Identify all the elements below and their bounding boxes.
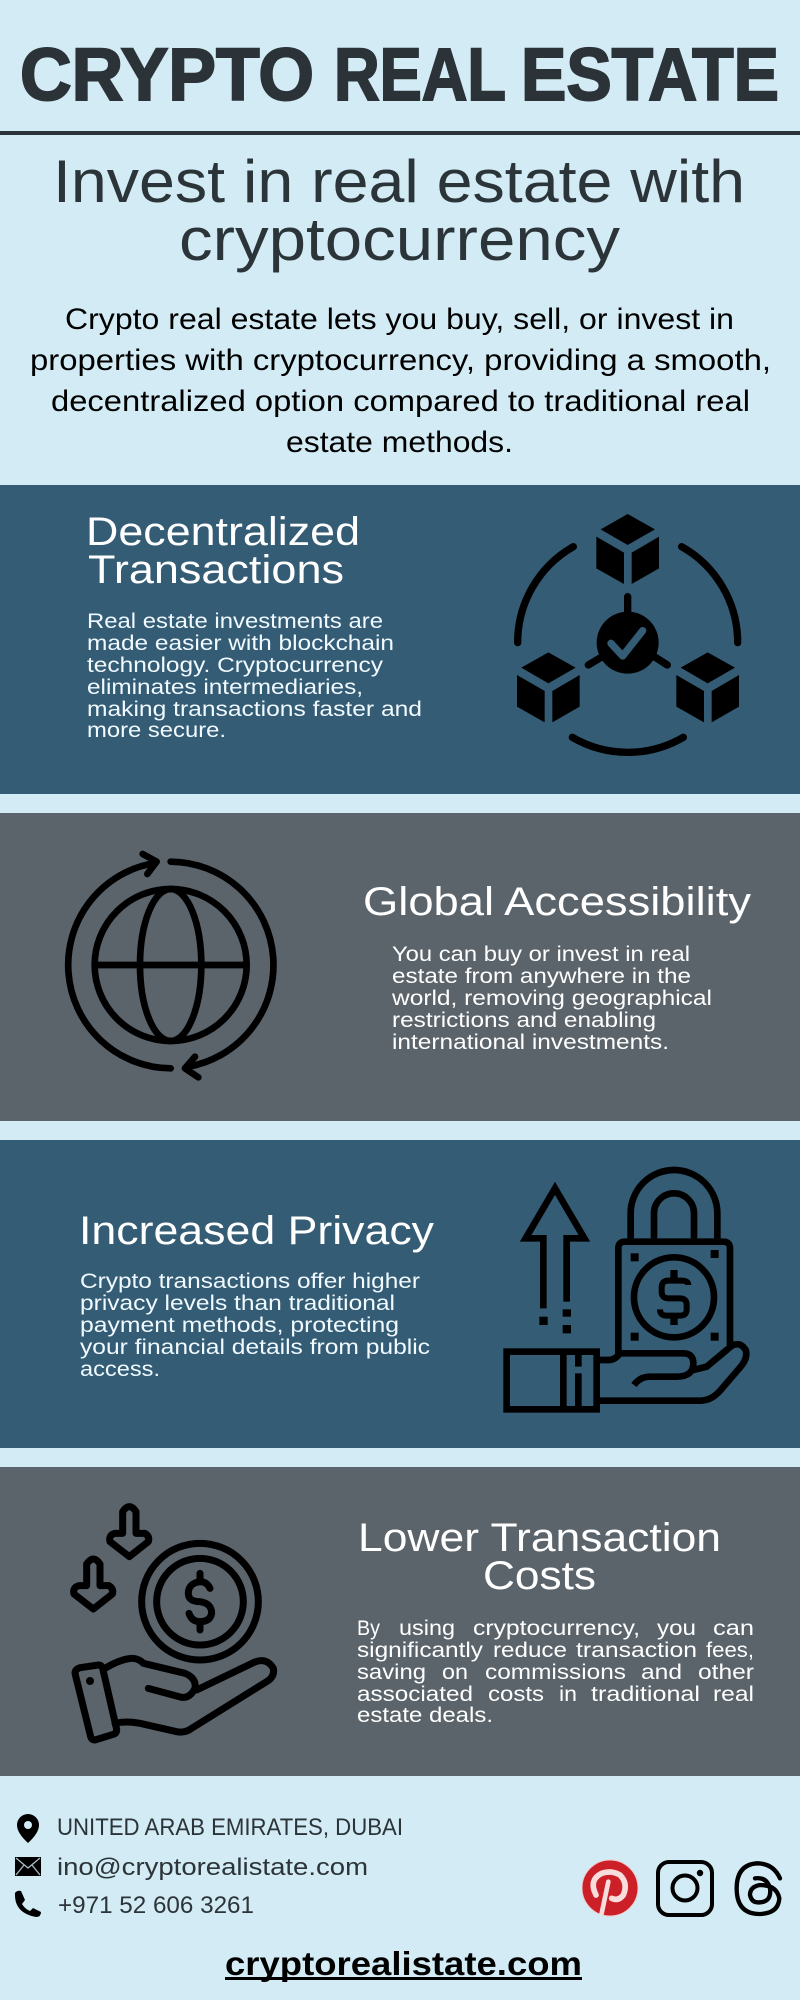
text: costs description: fees, [706,1638,754,1662]
icon: coin over hand with down arrows [74,1507,274,1740]
text: costs description: associated [357,1682,473,1706]
text: costs description [357,1616,754,1727]
text: decentralized description: eliminates intermediaries, [87,675,363,699]
text: decentralized description: made easier with blockchain [87,631,394,655]
title: REAL [334,33,506,116]
icon: envelope [15,1857,41,1876]
title [20,33,779,116]
text: costs description: saving [357,1660,426,1684]
heading: decentralized transactions [86,510,360,592]
text: costs description: costs [488,1682,544,1706]
text: costs description: you [657,1616,696,1640]
text: privacy description: access. [80,1357,160,1381]
text: global description [391,942,712,1054]
text: costs description: real [713,1682,754,1706]
text: costs description: in [559,1682,577,1706]
icon: blockchain network [517,514,739,752]
intro text: properties with cryptocurrency, providing a smooth, [30,344,771,377]
email: ino@cryptorealistate.com [57,1854,368,1881]
heading: decentralized transactions: Transactions [88,548,344,592]
text: privacy description [80,1269,430,1381]
text: privacy description: privacy levels than traditional [80,1291,395,1315]
text: costs description: other [698,1660,754,1684]
text: global description: estate from anywhere in the [392,964,691,988]
text: decentralized description: more secure. [87,718,226,742]
website link: cryptorealistate.com [225,1945,582,1982]
address: UNITED ARAB EMIRATES, DUBAI [57,1814,403,1841]
text: global description: world, removing geographical [391,986,712,1010]
text: costs description: using [399,1616,455,1640]
text: decentralized description: technology. Cryptocurrency [87,653,383,677]
divider [0,131,800,135]
text: costs description: traditional [591,1682,700,1706]
heading: lower transaction costs [358,1516,721,1598]
text: global description: You can buy or invest in real [392,942,690,966]
text: costs description: commissions [485,1660,626,1684]
title: ESTATE [521,33,779,116]
icon: instagram [658,1862,712,1915]
text: costs description: on [442,1660,468,1684]
footer: contact details [15,1814,403,1919]
text: decentralized description [87,609,422,742]
phone number: +971 52 606 3261 [58,1892,254,1919]
icon: phone [15,1891,41,1917]
text: costs description: By [357,1616,380,1640]
subtitle [53,148,745,273]
subtitle: Invest in real estate with [53,148,745,215]
heading: lower transaction costs: Lower Transaction [358,1516,721,1560]
icon: pinterest [582,1860,638,1916]
social icons [582,1860,780,1916]
panel: increased privacy [0,1140,800,1448]
text: costs description: estate deals. [357,1703,493,1727]
text: costs description: transaction [576,1638,697,1662]
text: costs description: cryptocurrency, [473,1616,640,1640]
title: CRYPTO [20,33,314,116]
heading: global accessibility: Global Accessibility [363,880,751,924]
text: decentralized description: making transactions faster and [87,697,422,721]
text: costs description: and [641,1660,682,1684]
text: costs description: can [713,1616,754,1640]
intro text: estate methods. [286,426,513,459]
heading: lower transaction costs: Costs [483,1554,596,1598]
icon: threads [737,1863,780,1914]
intro text: decentralized option compared to traditional real [51,385,750,418]
text: costs description: significantly [357,1638,483,1662]
icon: padlock on hand with up arrow [507,1170,746,1409]
text: privacy description: Crypto transactions offer higher [80,1269,420,1293]
subtitle: cryptocurrency [179,206,620,273]
intro text: Crypto real estate lets you buy, sell, or invest in [65,303,734,336]
text: global description: restrictions and enabling [392,1008,656,1032]
text: decentralized description: Real estate investments are [87,609,383,633]
text: costs description: reduce [493,1638,567,1662]
icon: globe with arrows [68,854,273,1077]
panel: decentralized transactions [0,485,800,794]
heading: decentralized transactions: Decentralized [86,510,360,554]
icon: location pin [17,1814,39,1843]
text: privacy description: your financial details from public [80,1335,430,1359]
text: privacy description: payment methods, protecting [80,1313,399,1337]
text: global description: international investments. [392,1030,669,1054]
intro text [30,303,771,459]
panel: lower transaction costs [0,1467,800,1776]
heading: increased privacy: Increased Privacy [79,1209,434,1253]
panel: global accessibility [0,813,800,1121]
